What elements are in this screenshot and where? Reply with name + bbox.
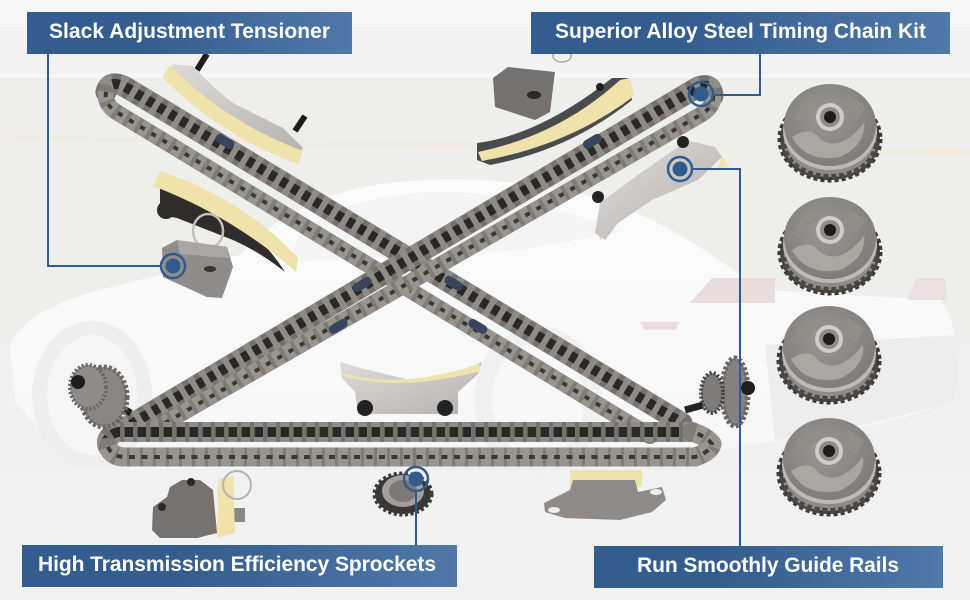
phaser gear 4 bbox=[779, 418, 879, 514]
tensioner: upper right bbox=[493, 50, 571, 120]
guide rail: upper right black and yellow bbox=[477, 78, 634, 165]
heading: high transmission efficiency sprockets bbox=[22, 545, 457, 587]
guide rail: lower center bbox=[340, 362, 482, 416]
phaser gear 1 bbox=[780, 84, 880, 180]
tensioner: left upper bbox=[162, 214, 233, 298]
callout connector: guide rails bbox=[668, 157, 740, 546]
phaser gear 2 bbox=[780, 197, 880, 293]
guide rail: right silver bbox=[592, 136, 730, 240]
chain: bottom horizontal loop bbox=[107, 432, 712, 457]
callout connector: sprockets bbox=[404, 467, 428, 545]
callout connector: timing chain kit bbox=[689, 54, 760, 106]
chain: second diagonal loop bbox=[125, 86, 713, 428]
guide rail: lower right bbox=[544, 470, 666, 520]
guide rail: left yellow with black backing bbox=[153, 171, 298, 272]
heading: run smoothly guide rails bbox=[594, 546, 943, 588]
cam sprocket: right bbox=[685, 358, 755, 426]
callout connector: slack adjustment tensioner bbox=[48, 54, 185, 278]
heading: slack adjustment tensioner bbox=[27, 12, 352, 54]
guide rail: upper left yellow with bolts bbox=[162, 54, 305, 164]
heading: slack adjustment tensioner: Slack Adjustment Tensioner bbox=[49, 20, 330, 43]
tensioner: lower left bbox=[152, 471, 251, 538]
heading: superior alloy steel timing chain kit: Superior Alloy Steel Timing Chain Kit bbox=[555, 20, 926, 43]
heading: run smoothly guide rails: Run Smoothly Guide Rails bbox=[637, 554, 899, 577]
chain: blue marker links bbox=[214, 132, 603, 335]
chain: first diagonal loop bbox=[106, 84, 682, 436]
heading: high transmission efficiency sprockets: High Transmission Efficiency Sprockets bbox=[38, 553, 436, 576]
cam sprocket: left bbox=[70, 365, 131, 427]
phaser gear 3 bbox=[779, 306, 879, 402]
crank sprocket bbox=[375, 474, 431, 514]
heading: superior alloy steel timing chain kit bbox=[531, 12, 950, 54]
